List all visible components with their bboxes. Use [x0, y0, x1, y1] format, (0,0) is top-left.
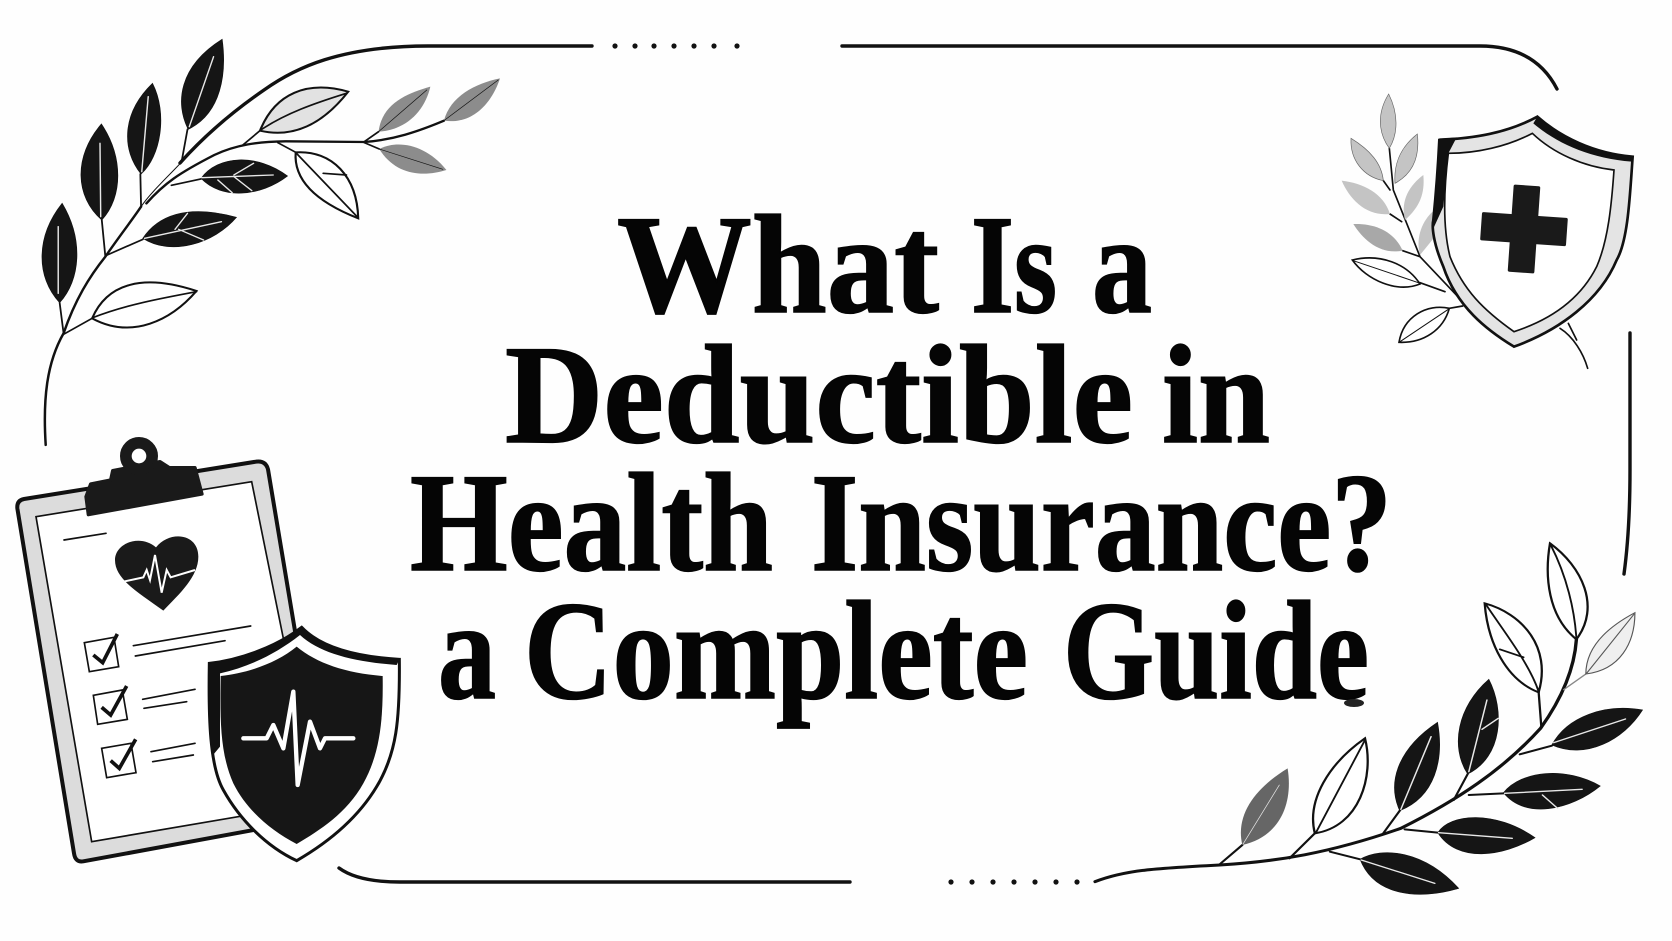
title: Insurance? — [811, 445, 1392, 601]
medical cross — [1478, 182, 1570, 276]
title: in — [1162, 317, 1270, 473]
title: Deductible — [505, 317, 1133, 473]
title — [410, 187, 1392, 729]
icon: clipboard with heart and checklist — [17, 439, 399, 861]
clipboard clip — [86, 439, 202, 515]
icon: top-right shield with cross and leaves — [1342, 94, 1633, 368]
title: a — [438, 573, 496, 729]
title: Is — [971, 187, 1057, 343]
title: Health — [410, 445, 773, 601]
title: Guide — [1063, 573, 1369, 729]
frame: rounded border lines and dots — [180, 43, 1630, 885]
title: What — [617, 187, 939, 343]
shield with pulse — [209, 627, 399, 861]
grey leaves sprig — [1342, 94, 1463, 342]
clipboard paper — [36, 482, 317, 842]
clipboard board — [17, 461, 326, 861]
icon: bottom-right leaf branch — [1095, 543, 1642, 894]
heart with pulse — [115, 536, 198, 611]
checklist — [84, 626, 251, 778]
title: a — [1092, 187, 1152, 343]
icon: top-left leaf branch — [42, 39, 500, 445]
title: Complete — [524, 573, 1028, 729]
shield — [1433, 117, 1633, 347]
